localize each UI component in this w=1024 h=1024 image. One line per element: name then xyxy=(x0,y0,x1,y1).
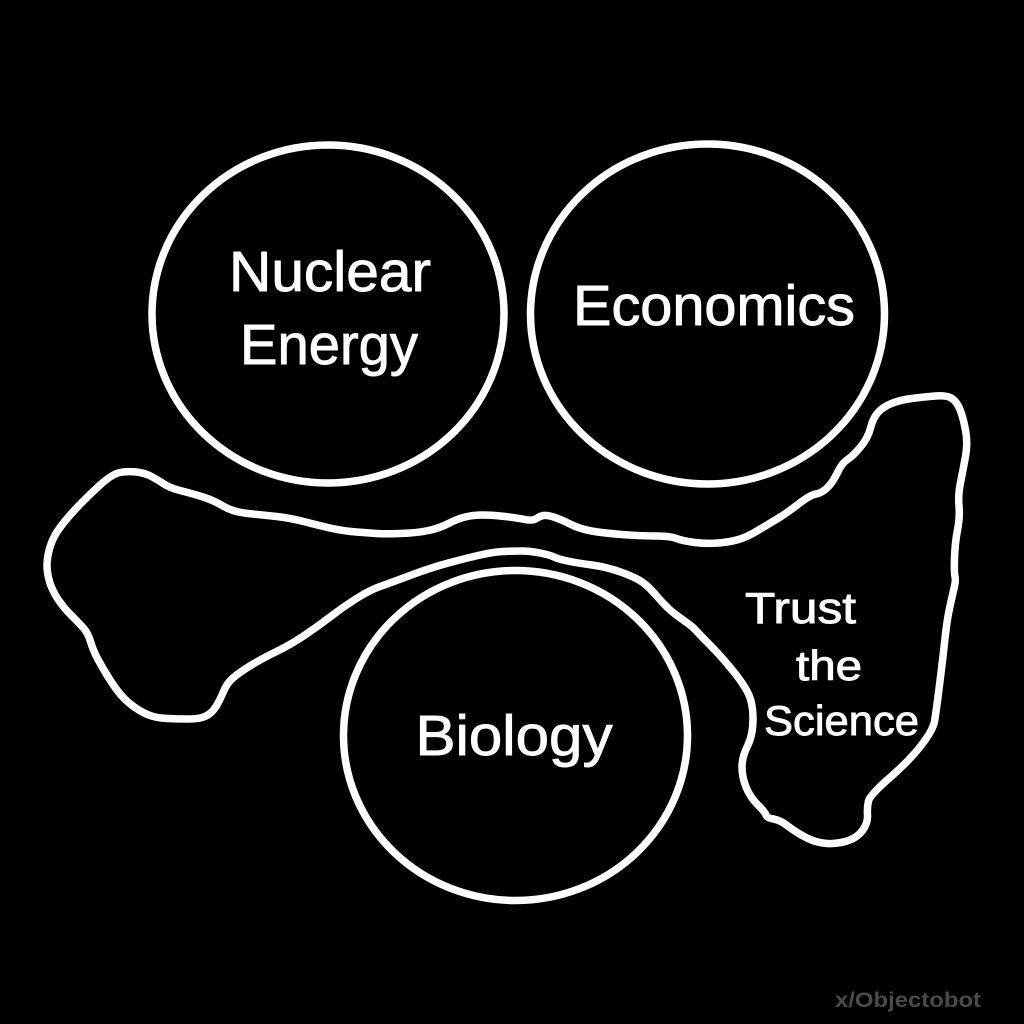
text: Trust the Science: the xyxy=(796,642,862,689)
circle: Nuclear Energy: Nuclear xyxy=(229,240,431,304)
text: Trust the Science: Trust xyxy=(745,584,856,633)
circle: Nuclear Energy xyxy=(152,145,504,483)
watermark: x/Objectobot xyxy=(835,989,981,1012)
circle: Economics xyxy=(530,144,884,484)
text: Trust the Science xyxy=(745,584,919,744)
circle: Biology: Biology xyxy=(416,704,613,768)
circle: Nuclear Energy: Energy xyxy=(240,313,418,377)
circle: Biology xyxy=(344,570,688,900)
circle: Economics: Economics xyxy=(573,274,855,338)
blob: Trust the Science outline xyxy=(47,396,967,844)
text: Trust the Science: Science xyxy=(764,697,919,744)
